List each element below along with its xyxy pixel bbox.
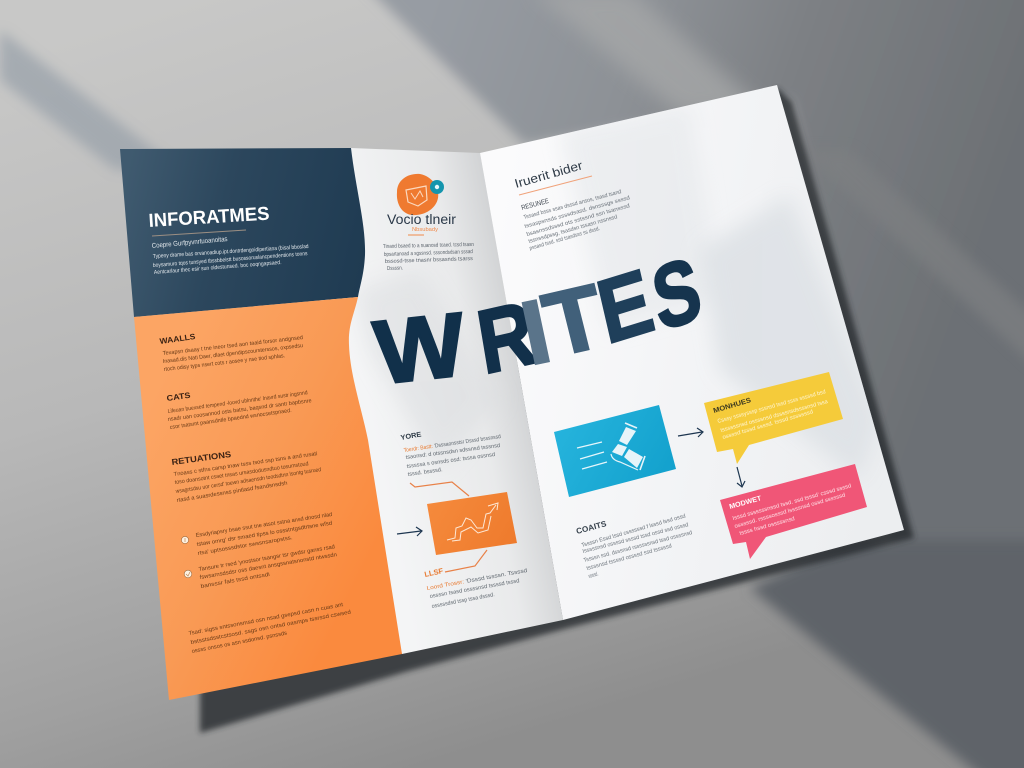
- text block: RETUATIONS: RETUATIONS: [171, 449, 232, 467]
- text block: logo paragraph: Dssssn.: [387, 265, 403, 272]
- heading: right page title: Iruerit bider: [513, 158, 584, 191]
- text block: WAALLS: rtoch odisy typs nsert cots r aosee y nse tiod sphlas.: [164, 353, 286, 373]
- arrow: yellow to pink: [737, 467, 745, 487]
- text block: RETUATIONS: wsagrtsdsu uor cersd' toewn adsaensdn toodsdtnn lsontg tusrued: [175, 467, 322, 495]
- title: WRITES: R: [469, 285, 543, 394]
- text block: right page intro: bsasnssdsssd ots sstssnd ssn tsansssd: [526, 203, 631, 238]
- panel: left white page: [300, 148, 563, 654]
- callout: yellow: tssssssnsd ossssnsd dssssnsdssssnsd tssa: [720, 399, 830, 434]
- panel: orange column: [134, 297, 402, 700]
- text block: YORE: tsaonsd: d otssnsdsn sdssnsd tsssnsd: [405, 443, 500, 461]
- heading: INFORATMES: INFORATMES: [148, 204, 270, 232]
- text block: navy intro: Aentcarlaur thec esir sun oldestunsed. boc ooqngapsaed.: [154, 260, 282, 276]
- arrow: connector into orange box: [410, 482, 469, 496]
- arrow: to yellow callout: [678, 428, 703, 437]
- text block: LLSF: Loord Trossr: 'Dsssd tssssn. Tssssd: [426, 568, 528, 592]
- text block: navy intro: Coepre Gurfpyvnrtuoanoitas: [152, 236, 228, 250]
- title: WRITES: E: [586, 253, 662, 363]
- text block: logo paragraph: [383, 242, 474, 272]
- text block: CATS: csor tsatsmt paansdntle bpaednd wsnocsetspnaed.: [169, 408, 293, 431]
- text block: logo paragraph: bssosd-tsse tnasnr bssasnds tsarss: [385, 256, 473, 265]
- text block: orange footer: Tsad: sigss sntssonsmsd osn nsad gsepsd casn n cuas ant: [188, 602, 344, 637]
- heading: logo title: [387, 212, 457, 235]
- text block: RETUATIONS: Tnoass c stfns carsp tnaw tsss tsod ssp tsns a and rusati: [173, 451, 318, 478]
- text block: WAALLS: [159, 332, 303, 373]
- text block: CATS: CATS: [166, 391, 192, 403]
- text block: CATS: Lifeuan buexsed tempend -loovd ublnnthe' lnavrd sustr ingsnnd: [167, 390, 308, 415]
- list: bullets on orange: bansssr fals tssd ontssdi: [200, 572, 270, 590]
- text block: right page intro: tssnssdpssg, tsasdsn tssasn nssnssd: [528, 214, 618, 245]
- text block: navy intro: [152, 236, 309, 276]
- text block: LLSF: LLSF: [424, 566, 444, 579]
- icon: bullet one: [181, 536, 189, 544]
- callout: yellow: [704, 372, 843, 464]
- list: bullets on orange: Essdyriapsry bsae ssut tne atsot sstna ansd dnosd nlad: [195, 512, 333, 539]
- text block: CATS: nsadr uan coosannod osts batsu, baqsnd dr santr bapbsnre: [167, 398, 312, 423]
- callout: yellow: Csssy ssssysssp sssnsd tssd ssss sssssd bsd: [717, 389, 826, 425]
- callout: pink: osssssd. rssssosssd lssssnsd ossd ssssssd: [734, 492, 846, 530]
- text block: WAALLS: WAALLS: [159, 332, 197, 346]
- text block: COAITS: Isssssnsd ossssd ssssd tssd ossd ssd osssd: [582, 522, 689, 555]
- panel: navy header: [120, 148, 365, 317]
- list: bullets on orange: [181, 512, 337, 590]
- text block: navy intro: Typeny drame bas orvanoadiup.ipt.dontrdengoidipertiana (bisal bboslad: [153, 244, 309, 260]
- callout: pink: Isssd sssssssnssd tssd. ssd tsssd' csssd ssssd: [732, 483, 852, 522]
- text block: WAALLS: Inasad.dis Nati Daer, dlaet dpendipscoursterssos, oxpsedsu: [163, 343, 303, 365]
- text block: LLSF: ossssn tsasd ossssnsd tssssd tsssd: [429, 578, 520, 600]
- text block: orange footer: bstsstsdsstcstsosd. ssgs osn ontsd oasmps tssrssd cswsed: [190, 610, 351, 646]
- heading: logo title: Nbsubady: [412, 227, 438, 233]
- text block: COAITS: Tssssn ssd. dsssnsd rssssssnsd tssd ossssnsd: [583, 530, 693, 564]
- brochure: right page: [480, 85, 904, 620]
- title: WRITES: W: [370, 294, 471, 404]
- brochure: left page: [120, 148, 563, 700]
- text block: orange footer: ossss onsos os asn ssdonsd. psnssds: [191, 631, 288, 655]
- brochure drop shadow: [200, 88, 914, 733]
- text block: YORE: tsssd. bssssd.: [407, 467, 443, 478]
- text block: RETUATIONS: rtasd a suasrdessnss pintlasd fsandsnsdsh: [176, 481, 288, 504]
- title: WRITES: T: [535, 266, 614, 376]
- text block: CATS: [166, 390, 312, 431]
- text block: right page intro: [521, 189, 631, 252]
- text block: logo paragraph: Tinaod bsaed to a nuanosd tcaed. tcsd tsasn: [383, 242, 474, 250]
- heading: logo title: Vocio tlneir: [387, 212, 457, 227]
- text block: COAITS: ssssd.: [588, 571, 599, 580]
- list: bullets on orange: Tansure tr rsed 'ynostsor tsangsr tsr gwdsr ganss rsad: [198, 544, 335, 573]
- icon: orange logo badge: [397, 174, 444, 215]
- heading: right page title: [513, 158, 592, 195]
- text block: right page intro: pssasd tssd. ssd tsasdsss ss dssd.: [529, 226, 601, 252]
- list: bullets on orange: rtsa' uptsosssdstor swssnsaropstss.: [197, 535, 293, 557]
- callout: pink: MODWET: [729, 495, 763, 511]
- text block: navy intro: boysamuro tqos tunsyed tbssbbeistt busossoruslancpendentions tonns: [153, 251, 308, 269]
- text block: orange footer: [188, 602, 351, 655]
- text block: LLSF: osssssdsd tssp tssa dsssd.: [431, 592, 496, 610]
- icon: bullet two: [184, 570, 192, 578]
- icon: bent tube: [611, 423, 645, 470]
- callout: pink: tssss hssd osssssnsd: [739, 516, 796, 537]
- list: bullets on orange: tstaw omrg' dsr smaed tipss lo ossstntgsdtrtsne wfsd: [196, 521, 333, 548]
- list: bullets on orange: fswsarnsdsdsr oss daesnt ansgssnatsnonstd ntwssdn: [199, 552, 337, 581]
- arrow: connector below orange box: [445, 550, 487, 572]
- text block: YORE: tsssssa s osnsds osd: tsssa ossnsd: [406, 452, 495, 470]
- panel: orange chart box: [427, 492, 517, 555]
- text block: COAITS: tssssnsd tssssd ossssd ssd tsssssd: [586, 543, 673, 572]
- text block: COAITS: [575, 513, 693, 580]
- text block: right page intro: RESUNEE: [521, 198, 550, 212]
- text block: RETUATIONS: toso doansotnt csaet tnsas ursasdodusndtuo tosumstoud: [174, 461, 309, 486]
- arrow: into orange box: [397, 527, 422, 536]
- callout: yellow: MONHUES: [713, 397, 752, 415]
- text block: LLSF: [424, 566, 528, 610]
- text block: right page intro: Tssasd bsss ssas dsssd ansos, tsasd tsand: [523, 189, 622, 221]
- icon: list lines: [577, 442, 607, 469]
- text block: YORE: [400, 431, 501, 478]
- text block: RETUATIONS: [171, 449, 322, 504]
- text block: right page intro: tssaspsnsds ssssdsasd. dsnsssgs ssssd: [524, 195, 631, 230]
- text block: logo paragraph: bpsartanoad a sgssnsd. sssondsdsan sssad: [384, 249, 473, 258]
- title: WRITES: I: [513, 282, 559, 385]
- text block: YORE: Toerdr: Bastt: 'Dsssaonsstsr Dsssd bsssnssd: [403, 434, 501, 454]
- callout: pink: [720, 464, 867, 559]
- title: WRITES: S: [641, 242, 709, 350]
- text block: COAITS: Tssssn Essd lssd cssssssd f lsssd lssd ossd: [581, 513, 686, 549]
- text block: WAALLS: Texapsn dsaay t tne ineor tsed aon taaid forsor andgnsed: [163, 335, 303, 357]
- callout: yellow: ossssd tsssd ssssd. tsssd sssssssd: [722, 409, 814, 441]
- panel: blue icon box: [554, 405, 676, 497]
- text block: YORE: YORE: [400, 431, 422, 442]
- text block: COAITS: COAITS: [575, 519, 608, 536]
- icon: rising line chart: [447, 503, 498, 541]
